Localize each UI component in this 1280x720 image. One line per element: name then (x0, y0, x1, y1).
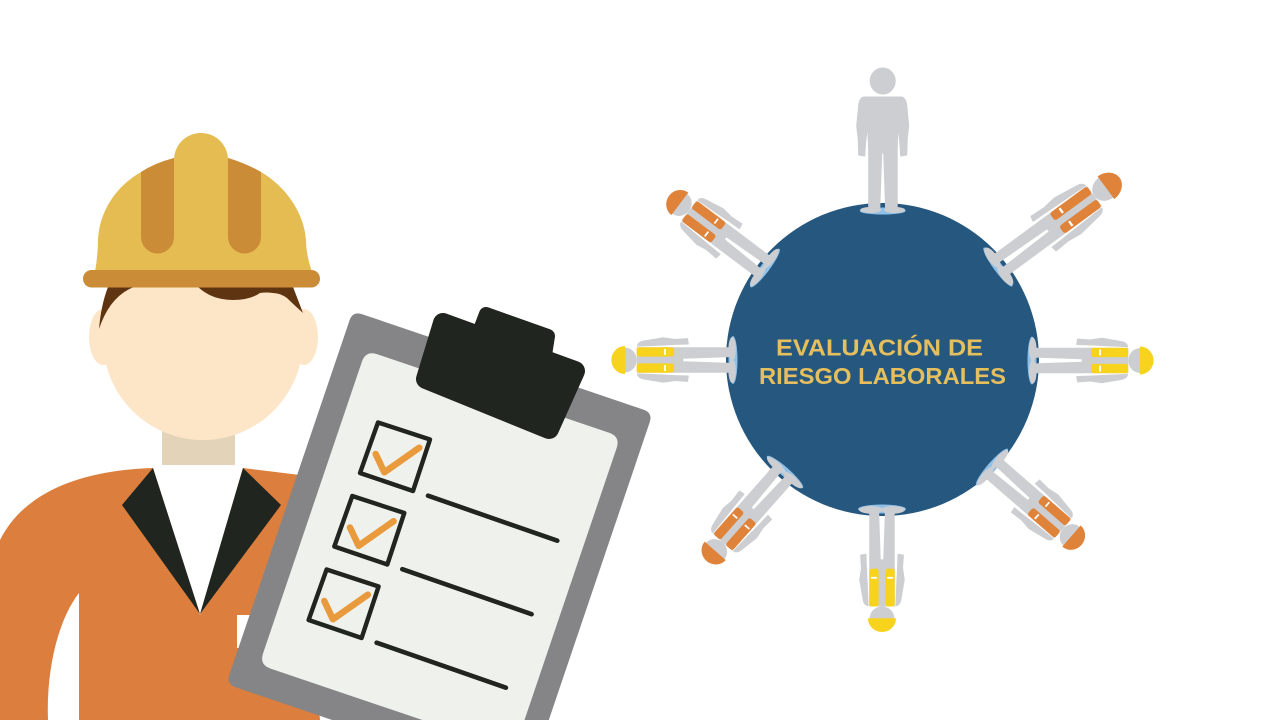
title text: RIESGO LABORALES (759, 363, 1006, 389)
figure: lower right, orange gear (973, 446, 1097, 563)
clipboard clip (426, 314, 575, 429)
right lapel (200, 468, 281, 614)
figure: lower left, orange gear (688, 453, 806, 577)
checklist item 1 (360, 422, 557, 541)
figure: left, yellow gear (611, 336, 738, 384)
checklist item 3 (309, 570, 506, 688)
left lapel (122, 468, 200, 614)
left ear (89, 309, 117, 365)
clipboard board (229, 313, 651, 720)
figure: upper left, orange gear (655, 177, 783, 290)
figure: top, no protective gear (857, 68, 909, 214)
face (99, 240, 303, 440)
shirt collar (153, 465, 243, 615)
figure: bottom, yellow gear (858, 504, 906, 632)
checklist item 2 (334, 496, 532, 614)
gap between arm and torso (48, 593, 79, 720)
hard hat (83, 133, 320, 288)
neck (162, 425, 235, 466)
illustration: worker with clipboard (0, 133, 651, 720)
title text (759, 334, 1006, 389)
figure: right, yellow gear (1028, 336, 1154, 384)
clipboard paper (262, 353, 618, 720)
title text: EVALUACIÓN DE (776, 334, 983, 360)
hair (99, 287, 303, 329)
jacket pocket (237, 615, 257, 648)
right ear (290, 309, 318, 365)
central navy circle (726, 203, 1039, 516)
figure: upper right, orange gear (980, 158, 1134, 289)
worker torso in orange jacket (0, 468, 320, 720)
clipboard (229, 313, 651, 720)
diagram: circle with workers around it (611, 68, 1154, 632)
